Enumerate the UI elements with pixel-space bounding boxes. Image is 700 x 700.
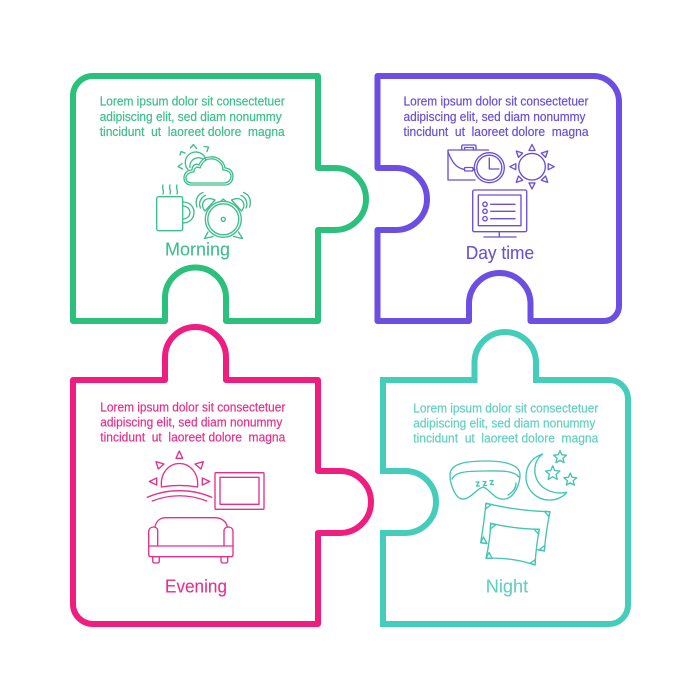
icon: sun — [510, 144, 554, 189]
text block: night description: tincidunt ut laoreet dolore magna — [413, 431, 598, 445]
icon: television — [215, 473, 264, 509]
panel: morning — [73, 76, 366, 321]
puzzle outline: morning — [73, 76, 366, 321]
text block: morning description: adipiscing elit, sed diam nonummy — [100, 110, 282, 124]
text block: day time description: tincidunt ut laoreet dolore magna — [404, 125, 589, 139]
puzzle outline: night — [383, 332, 628, 624]
icon: sleep mask — [450, 461, 520, 499]
text block: evening description: adipiscing elit, sed diam nonummy — [100, 416, 283, 430]
icon: sun and cloud — [178, 144, 233, 185]
text block: morning description — [100, 95, 285, 139]
icon: briefcase with clock — [448, 145, 504, 183]
text block: night description: Lorem ipsum dolor sit consectetuer — [413, 401, 598, 415]
text block: night description — [413, 401, 598, 445]
panel: evening — [73, 327, 371, 624]
icon: computer monitor — [473, 190, 527, 237]
panel: day time — [378, 76, 619, 321]
label: Night: Night — [486, 576, 528, 597]
puzzle outline: evening — [73, 327, 371, 624]
icon: sofa — [149, 518, 233, 563]
icon: pillows — [481, 503, 550, 565]
label: Day time: Day time — [466, 242, 534, 263]
text block: morning description: tincidunt ut laoreet dolore magna — [100, 125, 285, 139]
puzzle outline: day time — [378, 76, 619, 321]
icon: crescent moon and stars — [526, 450, 577, 500]
text block: day time description: Lorem ipsum dolor sit consectetuer — [404, 95, 588, 109]
text block: evening description: tincidunt ut laoreet dolore magna — [100, 431, 285, 445]
text block: evening description: Lorem ipsum dolor sit consectetuer — [100, 401, 285, 415]
text block: day time description: adipiscing elit, sed diam nonummy — [404, 110, 586, 124]
text block: night description: adipiscing elit, sed diam nonummy — [413, 416, 596, 430]
text block: evening description — [100, 401, 285, 445]
icon: sunset — [147, 451, 212, 501]
label: Evening: Evening — [165, 576, 227, 597]
label: Morning: Morning — [165, 239, 230, 260]
text block: morning description: Lorem ipsum dolor sit consectetuer — [100, 95, 285, 109]
icon: coffee mug — [157, 185, 194, 231]
text block: day time description — [404, 95, 589, 139]
icon: alarm clock — [196, 192, 250, 238]
panel: night — [383, 332, 628, 624]
